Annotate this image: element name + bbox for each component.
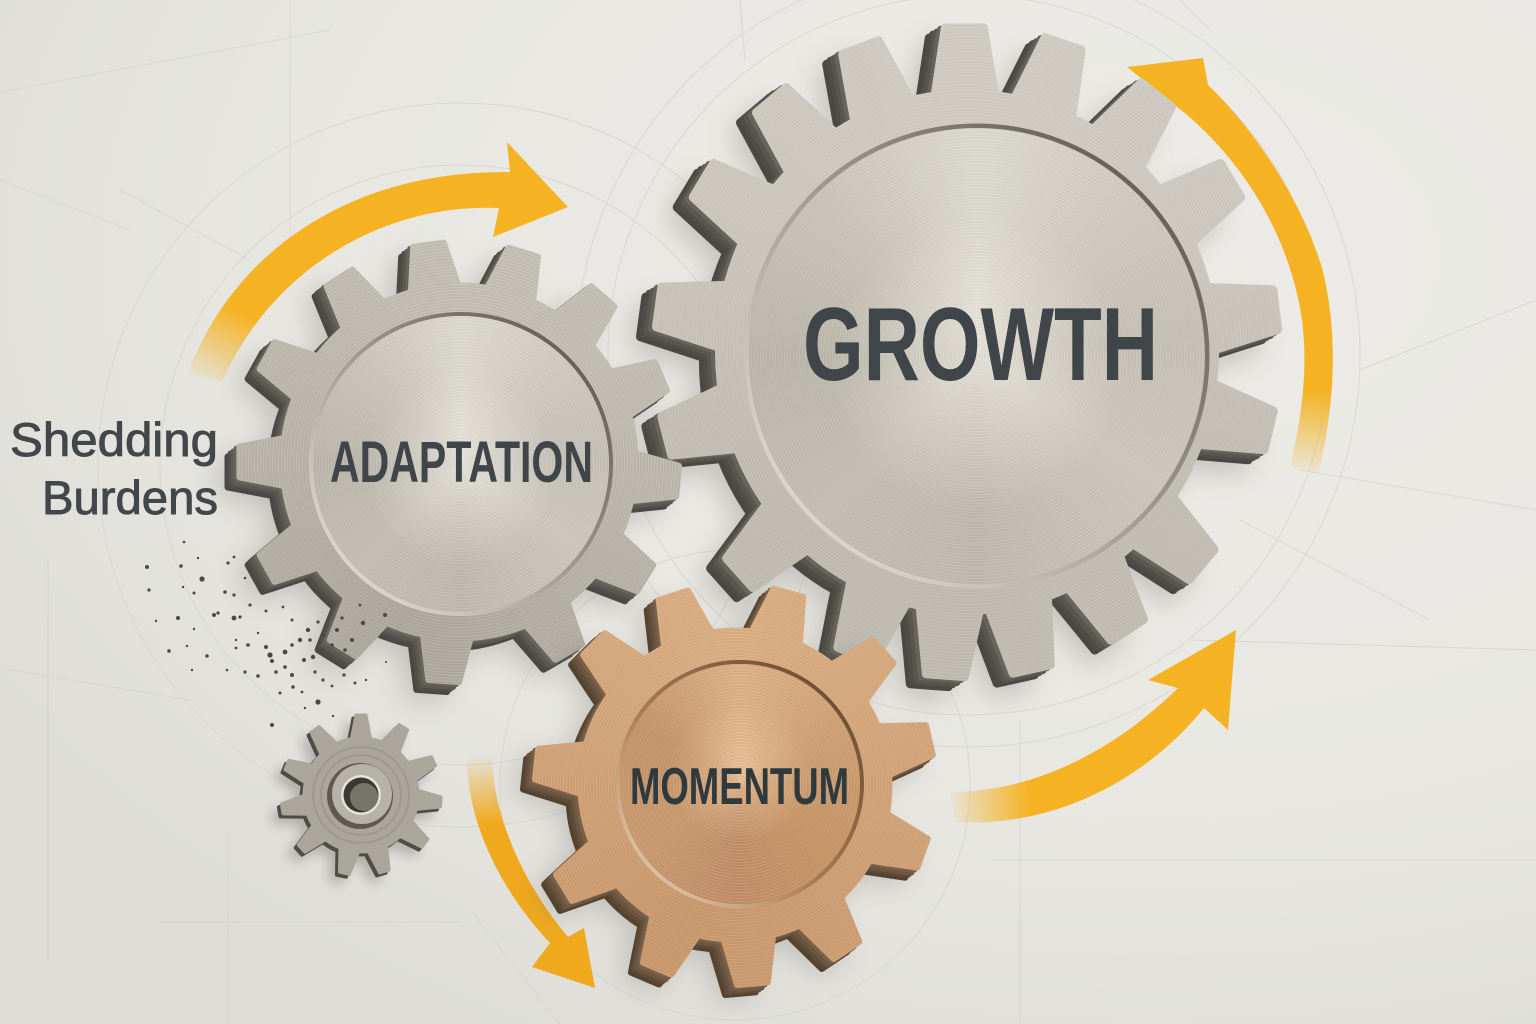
- dust particles: [145, 541, 387, 727]
- gear: momentum: [515, 565, 955, 1005]
- arrow: momentum to growth: [950, 630, 1236, 822]
- side label: shedding burdens: [10, 413, 218, 524]
- side label: shedding burdens: Shedding: [10, 413, 218, 466]
- label: growth: GROWTH: [803, 287, 1158, 403]
- arrow: adaptation to growth: [188, 142, 568, 382]
- label: momentum: MOMENTUM: [630, 758, 849, 816]
- gear: small idler: [271, 715, 442, 884]
- gear: adaptation: [219, 222, 699, 702]
- gear: growth: [631, 2, 1303, 702]
- side label: shedding burdens: Burdens: [42, 471, 218, 524]
- label: adaptation: ADAPTATION: [330, 430, 593, 495]
- arrow: down to momentum: [467, 755, 595, 988]
- arrow: growth clockwise: [1127, 58, 1333, 476]
